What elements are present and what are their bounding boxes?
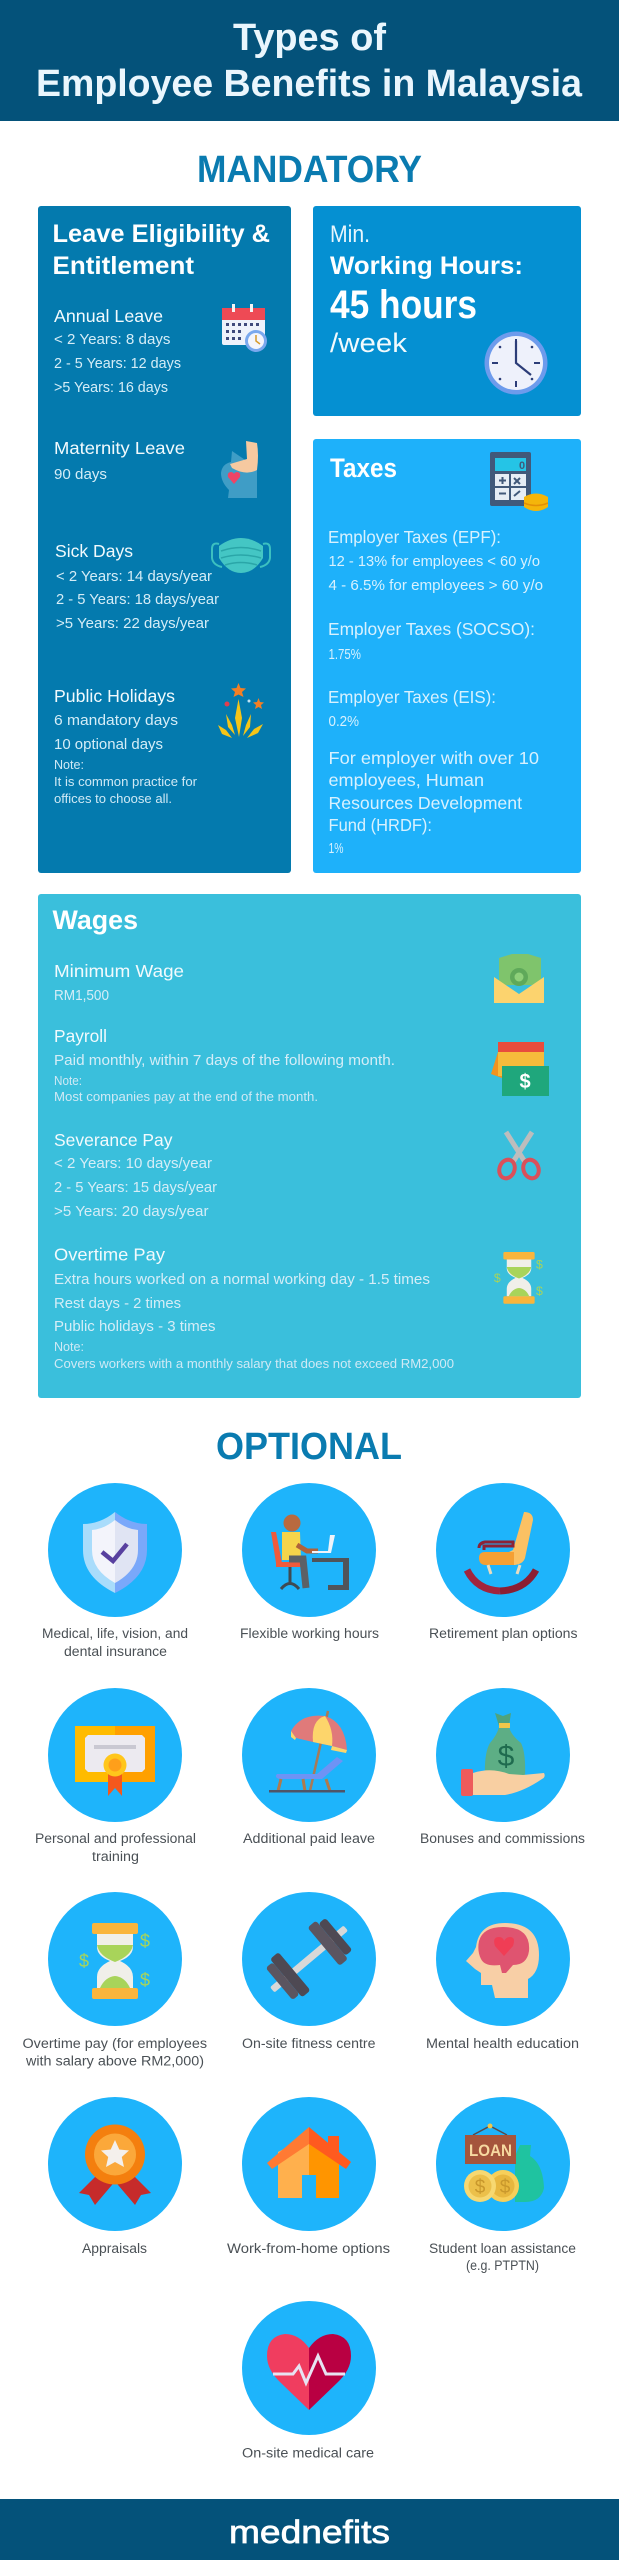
header banner: Types of [233,17,386,59]
overtime pay text: Overtime Pay [54,1244,165,1264]
panel: wages [38,894,581,1398]
sick days text: < 2 Years: 14 days/year [56,569,212,585]
icon: fireworks [218,683,264,738]
tax: SOCSO: 1.75% [328,647,361,663]
icon: payroll calendar [491,1042,549,1096]
icon: calendar [222,304,267,352]
annual leave text [54,306,181,396]
benefit: overtime pay: $ [140,1970,150,1990]
footer bar with logo [0,2499,619,2560]
maternity leave text: Maternity Leave [54,438,185,458]
header banner: Employee Benefits in Malaysia [36,63,583,105]
benefit: paid leave: Additional paid leave [243,1831,375,1846]
benefit: student loan: $ [475,2177,486,2198]
panel: minimum working hours: 45 hours [330,283,477,327]
tax: SOCSO [328,619,535,663]
icon: clock [484,332,548,394]
benefit: work from home [227,2097,390,2256]
benefit: mental health: Mental health education [426,2036,579,2051]
icon: small hourglass: $ [494,1271,501,1285]
benefit: overtime pay: $ [140,1931,150,1951]
severance pay text: >5 Years: 20 days/year [54,1204,209,1220]
severance pay text [54,1130,217,1220]
minimum wage text: Minimum Wage [54,961,184,981]
benefit: medical care: On-site medical care [242,2446,374,2460]
payroll text: Paid monthly, within 7 days of the following month. [54,1053,395,1069]
benefit: flexible hours [240,1483,379,1641]
sick days text: >5 Years: 22 days/year [56,616,209,632]
icon: calculator and coins: 0 [519,460,525,472]
benefit: appraisals: Appraisals [82,2241,147,2256]
benefit: bonuses: Bonuses and commissions [420,1831,585,1846]
severance pay text: 2 - 5 Years: 15 days/year [54,1180,217,1196]
header banner [0,0,619,121]
benefit: insurance: dental insurance [64,1644,167,1659]
benefit: insurance [42,1483,188,1659]
benefit: retirement plan [429,1483,578,1641]
sick days text: Sick Days [55,541,133,561]
heading: mandatory: MANDATORY [197,149,422,191]
tax: HRDF [328,748,539,857]
public holidays text: 6 mandatory days [54,713,178,729]
benefit: bonuses: $ [498,1740,515,1773]
footer bar with logo: mednefits [229,2514,390,2550]
overtime pay text: Note: [54,1340,84,1354]
public holidays text: It is common practice for [54,775,197,789]
annual leave text: 2 - 5 Years: 12 days [54,356,181,372]
minimum wage text: RM1,500 [54,988,109,1004]
benefit: student loan: Student loan assistance [429,2241,576,2256]
panel: minimum working hours: /week [330,328,408,358]
panel: minimum working hours [313,206,581,416]
panel: minimum working hours: Working Hours: [330,252,523,280]
severance pay text: Severance Pay [54,1130,173,1150]
benefit: appraisals [48,2097,182,2256]
tax: HRDF: For employer with over 10 [328,748,539,768]
public holidays text: Note: [54,758,84,772]
tax: HRDF: employees, Human [328,770,484,790]
icon: pregnant woman [221,441,258,498]
overtime pay text: Rest days - 2 times [54,1296,181,1312]
icon: money envelope [494,954,544,1003]
sick days text [55,541,219,632]
payroll text: Payroll [54,1026,107,1046]
icon: payroll calendar: $ [519,1071,531,1093]
tax: EIS: 0.2% [328,714,359,730]
overtime pay text: Extra hours worked on a normal working day - 1.5 times [54,1272,430,1288]
payroll text: Most companies pay at the end of the month. [54,1090,318,1104]
minimum wage text [54,961,184,1004]
payroll text [54,1026,395,1104]
annual leave text: >5 Years: 16 days [54,380,168,396]
benefit: fitness centre: On-site fitness centre [242,2036,376,2051]
public holidays text: offices to choose all. [54,792,172,806]
tax: EPF: 12 - 13% for employees < 60 y/o [328,554,540,570]
tax: EPF: Employer Taxes (EPF): [328,527,501,547]
panel: leave eligibility and entitlement: Entitlement [52,252,195,280]
sick days text: 2 - 5 Years: 18 days/year [56,592,219,608]
panel: wages: Wages [52,905,138,935]
panel: minimum working hours: Min. [330,221,370,248]
benefit: student loan: (e.g. PTPTN) [466,2258,539,2273]
benefit: overtime pay: Overtime pay (for employees [22,2036,207,2051]
tax: EIS [328,687,496,730]
tax: HRDF: Fund (HRDF): [328,815,432,835]
benefit: overtime pay [22,1892,207,2068]
icon: small hourglass [494,1252,543,1304]
benefit: overtime pay: with salary above RM2,000) [25,2054,204,2068]
overtime pay text: Covers workers with a monthly salary that does not exceed RM2,000 [54,1357,454,1371]
benefit: paid leave [242,1688,376,1846]
panel: leave eligibility and entitlement: Leave Eligibility & [52,220,270,248]
overtime pay text: Public holidays - 3 times [54,1319,216,1335]
benefit: flexible hours: Flexible working hours [240,1626,379,1641]
tax: EIS: Employer Taxes (EIS): [328,687,496,707]
icon: small hourglass: $ [536,1284,543,1298]
icon: face mask [212,538,270,573]
benefit: training: Personal and professional [35,1831,196,1846]
tax: EPF [328,527,543,594]
tax: SOCSO: Employer Taxes (SOCSO): [328,619,535,639]
panel: leave eligibility and entitlement [38,206,291,873]
heading: optional: OPTIONAL [216,1426,402,1468]
benefit: student loan: $ [500,2177,511,2198]
panel: taxes [313,439,581,873]
tax: EPF: 4 - 6.5% for employees > 60 y/o [328,578,543,594]
benefit: student loan [429,2097,576,2273]
benefit: work from home: Work-from-home options [227,2241,390,2256]
icon: scissors [497,1132,541,1180]
benefit: training: training [92,1849,139,1864]
benefit: student loan: LOAN [469,2141,512,2160]
benefit: medical care [242,2301,376,2460]
benefit: training [35,1688,196,1864]
public holidays text: 10 optional days [54,737,163,753]
benefit: overtime pay: $ [79,1951,89,1971]
annual leave text: Annual Leave [54,306,163,326]
benefit: bonuses [420,1688,585,1846]
benefit: retirement plan: Retirement plan options [429,1626,578,1641]
payroll text: Note: [54,1074,82,1088]
icon: small hourglass: $ [536,1257,543,1271]
maternity leave text [54,438,185,483]
public holidays text: Public Holidays [54,686,175,706]
benefit: insurance: Medical, life, vision, and [42,1626,188,1641]
severance pay text: < 2 Years: 10 days/year [54,1156,212,1172]
maternity leave text: 90 days [54,467,107,483]
panel: taxes: Taxes [330,453,397,483]
benefit: mental health [426,1892,579,2051]
public holidays text [54,686,197,806]
annual leave text: < 2 Years: 8 days [54,332,170,348]
tax: HRDF: 1% [328,841,344,857]
tax: HRDF: Resources Development [328,793,522,813]
benefit: fitness centre [242,1892,376,2051]
icon: calculator and coins [490,452,548,511]
overtime pay text [54,1244,454,1371]
